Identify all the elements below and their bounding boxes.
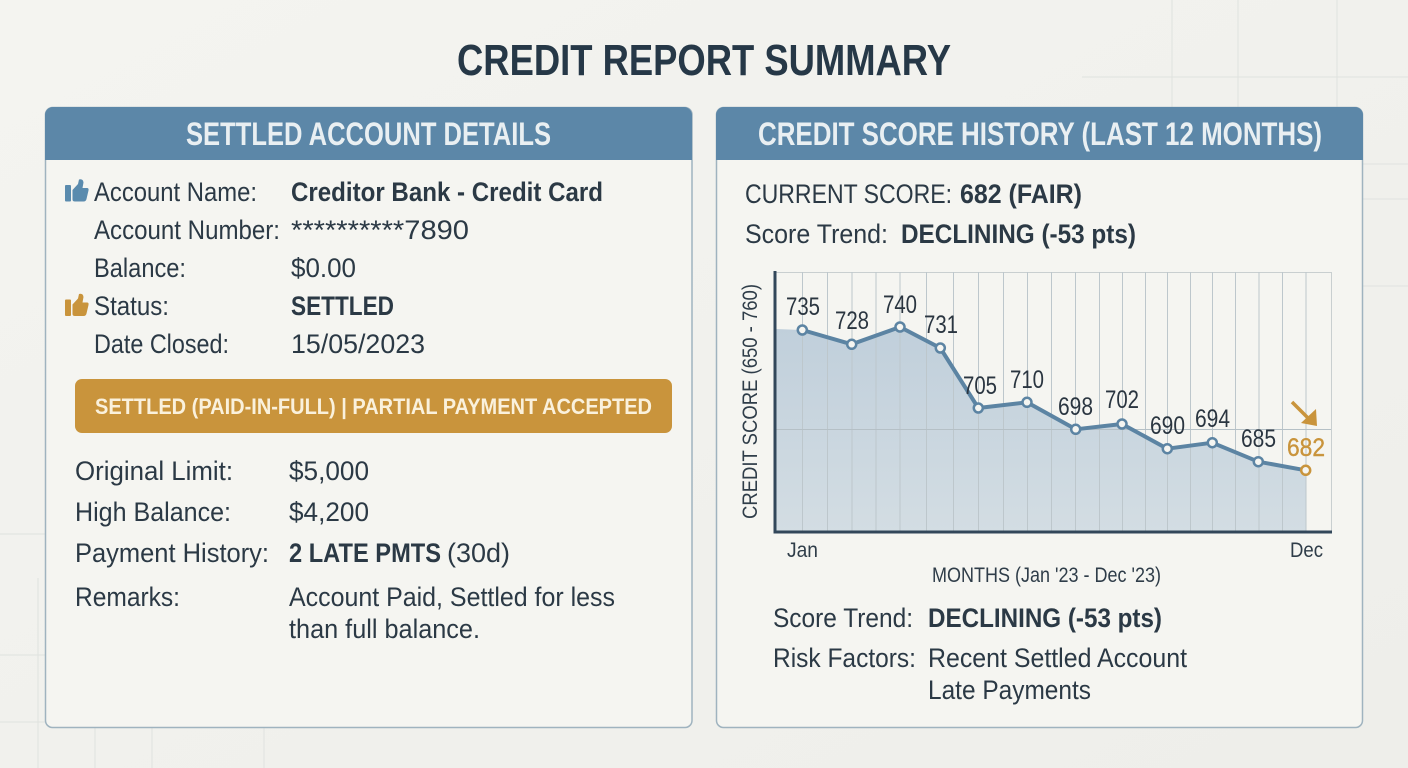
score trend bottom: DECLINING (-53 pts) [928, 603, 1162, 633]
score line [802, 327, 1306, 470]
score trend top [745, 219, 1136, 249]
risk factors [773, 643, 1187, 705]
data labels: 685 [1241, 425, 1276, 453]
status row: SETTLED [291, 291, 394, 321]
data labels: 728 [835, 307, 869, 335]
data labels [786, 291, 1325, 462]
data labels: 740 [883, 291, 917, 319]
data labels: 698 [1058, 393, 1093, 421]
callout: settled banner [75, 379, 672, 433]
title: CREDIT REPORT SUMMARY [457, 36, 951, 85]
payment history row [75, 538, 510, 568]
risk factors: Late Payments [928, 675, 1091, 705]
score trend top: Score Trend: [745, 219, 888, 249]
account name row: Creditor Bank - Credit Card [291, 177, 603, 207]
data points [798, 322, 1310, 475]
payment history row: Payment History: [75, 538, 269, 568]
account number row: Account Number: [94, 215, 280, 245]
data labels: 694 [1195, 405, 1230, 433]
x axis labels [787, 539, 1323, 587]
account number row [94, 215, 469, 245]
panel: settled account details [45, 107, 692, 728]
data labels: 702 [1105, 386, 1139, 414]
icon: gold thumbs up [65, 294, 89, 316]
score trend bottom: Score Trend: [773, 603, 913, 633]
payment history row: 2 LATE PMTS [289, 538, 441, 568]
high balance row [75, 497, 369, 527]
data labels: 705 [963, 372, 997, 400]
data labels: 710 [1010, 366, 1044, 394]
chart area fill [776, 327, 1306, 532]
y axis label: CREDIT SCORE (650 - 760) [738, 284, 762, 519]
balance row: $0.00 [291, 253, 356, 283]
original limit row: Original Limit: [75, 456, 233, 486]
payment history row: (30d) [447, 538, 510, 568]
data labels: 690 [1150, 412, 1185, 440]
risk factors: Recent Settled Account [928, 643, 1187, 673]
remarks row: Remarks: [75, 582, 180, 612]
balance row [94, 253, 356, 283]
balance row: Balance: [94, 253, 186, 283]
icon: blue thumbs up [65, 179, 89, 202]
status row [94, 291, 394, 321]
data labels: 682 [1287, 434, 1325, 462]
original limit row [75, 456, 369, 486]
date closed row: Date Closed: [94, 329, 229, 359]
remarks row [75, 582, 615, 644]
remarks row: Account Paid, Settled for less [289, 582, 615, 612]
x axis labels: MONTHS (Jan '23 - Dec '23) [932, 564, 1161, 587]
current score: 682 (FAIR) [960, 179, 1082, 209]
x axis labels: Dec [1290, 539, 1323, 562]
score trend top: DECLINING (-53 pts) [901, 219, 1136, 249]
date closed row [94, 329, 425, 359]
risk factors: Risk Factors: [773, 643, 916, 673]
date closed row: 15/05/2023 [291, 329, 425, 359]
high balance row: $4,200 [289, 497, 369, 527]
panel header: settled account details: SETTLED ACCOUNT DETAILS [186, 116, 551, 152]
current score: CURRENT SCORE: [745, 179, 952, 209]
panel: credit score history [716, 107, 1363, 728]
line chart: credit score [738, 271, 1332, 587]
data labels: 731 [924, 311, 958, 339]
status row: Status: [94, 291, 169, 321]
account number row: **********7890 [291, 215, 469, 245]
arrow: declining [1292, 402, 1317, 426]
x axis labels: Jan [787, 539, 818, 562]
original limit row: $5,000 [289, 456, 369, 486]
callout: settled banner: SETTLED (PAID-IN-FULL) | PARTIAL PAYMENT ACCEPTED [95, 394, 652, 419]
score trend bottom [773, 603, 1162, 633]
panel header: settled account details [45, 107, 692, 160]
high balance row: High Balance: [75, 497, 231, 527]
axes [775, 271, 1332, 532]
account name row: Account Name: [94, 177, 257, 207]
account name row [94, 177, 603, 207]
remarks row: than full balance. [289, 614, 480, 644]
panel header: credit score history [716, 107, 1363, 160]
data labels: 735 [786, 293, 820, 321]
